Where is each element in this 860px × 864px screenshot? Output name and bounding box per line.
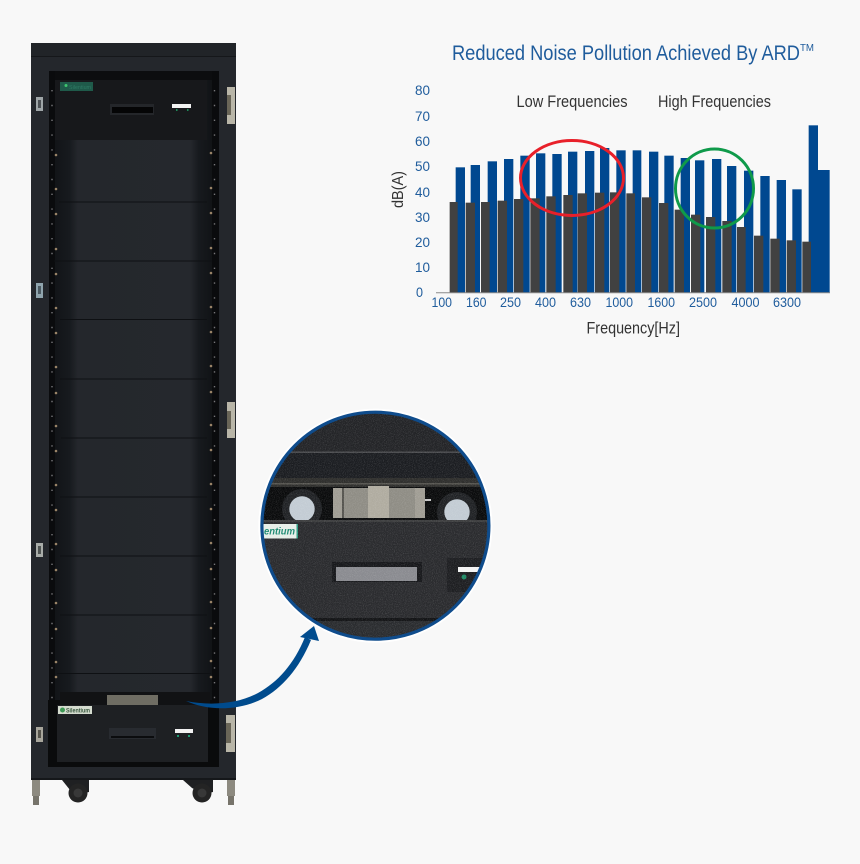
top unit logo label: Silentium <box>69 85 91 91</box>
y axis labels: 30 <box>415 209 430 225</box>
lens blue ring <box>262 412 489 639</box>
foam window <box>332 562 422 582</box>
logo label: entium <box>264 526 295 538</box>
top unit logo label <box>60 82 93 91</box>
cabinet feet and casters <box>32 780 235 805</box>
acoustic foam <box>333 486 431 518</box>
cabinet interior <box>49 71 219 705</box>
fans <box>282 489 477 520</box>
x axis labels: 160 <box>466 294 487 310</box>
rack rivets <box>55 152 212 678</box>
x axis labels <box>432 294 801 310</box>
y axis labels: 10 <box>415 259 430 275</box>
bar chart <box>390 82 830 338</box>
x axis labels: 100 <box>432 294 452 310</box>
status panel <box>447 558 482 592</box>
cabinet frame <box>31 43 236 780</box>
cabinet base edge <box>31 778 236 780</box>
shelf divider lines <box>54 202 212 674</box>
x axis title: Frequency[Hz] <box>586 318 680 338</box>
y axis title: dB(A) <box>390 171 407 208</box>
lens outer ring <box>258 409 492 643</box>
powder coat speckle <box>264 414 488 638</box>
y axis labels: 60 <box>415 133 430 149</box>
arrow from bottom unit to lens <box>186 626 319 708</box>
bottom unit logo label: Silentium <box>66 708 90 714</box>
x axis labels: 630 <box>570 294 591 310</box>
rack holes <box>52 90 214 700</box>
y axis labels <box>415 82 430 300</box>
lens contents <box>264 414 488 638</box>
chart title: Reduced Noise Pollution Achieved By ARD <box>452 42 800 65</box>
door hinges and latches <box>36 87 235 752</box>
y axis labels: 0 <box>416 284 423 300</box>
y axis labels: 20 <box>415 234 430 250</box>
green circle: high frequencies <box>676 149 754 228</box>
y axis labels: 40 <box>415 184 430 200</box>
dark bars <box>450 192 811 293</box>
y axis labels: 80 <box>415 82 430 98</box>
y axis labels: 50 <box>415 158 430 174</box>
x axis labels: 4000 <box>732 294 760 310</box>
blue bars <box>456 125 830 293</box>
x axis labels: 250 <box>500 294 521 310</box>
x axis line <box>436 292 830 294</box>
x axis labels: 400 <box>535 294 556 310</box>
label: high frequencies: High Frequencies <box>658 92 771 111</box>
x axis labels: 6300 <box>773 294 801 310</box>
top ARD unit <box>55 80 207 140</box>
x axis labels: 2500 <box>689 294 717 310</box>
server cabinet <box>31 43 236 805</box>
bottom unit logo label <box>58 706 92 714</box>
chart title: TM <box>800 42 814 54</box>
y axis labels: 70 <box>415 108 430 124</box>
bottom unit fan gap <box>60 692 210 706</box>
x axis labels: 1600 <box>648 294 675 310</box>
bottom ARD unit <box>57 705 208 762</box>
x axis labels: 1000 <box>606 294 633 310</box>
red circle: low frequencies <box>520 140 624 216</box>
magnified detail lens <box>255 405 497 646</box>
label: low frequencies: Low Frequencies <box>516 92 628 111</box>
